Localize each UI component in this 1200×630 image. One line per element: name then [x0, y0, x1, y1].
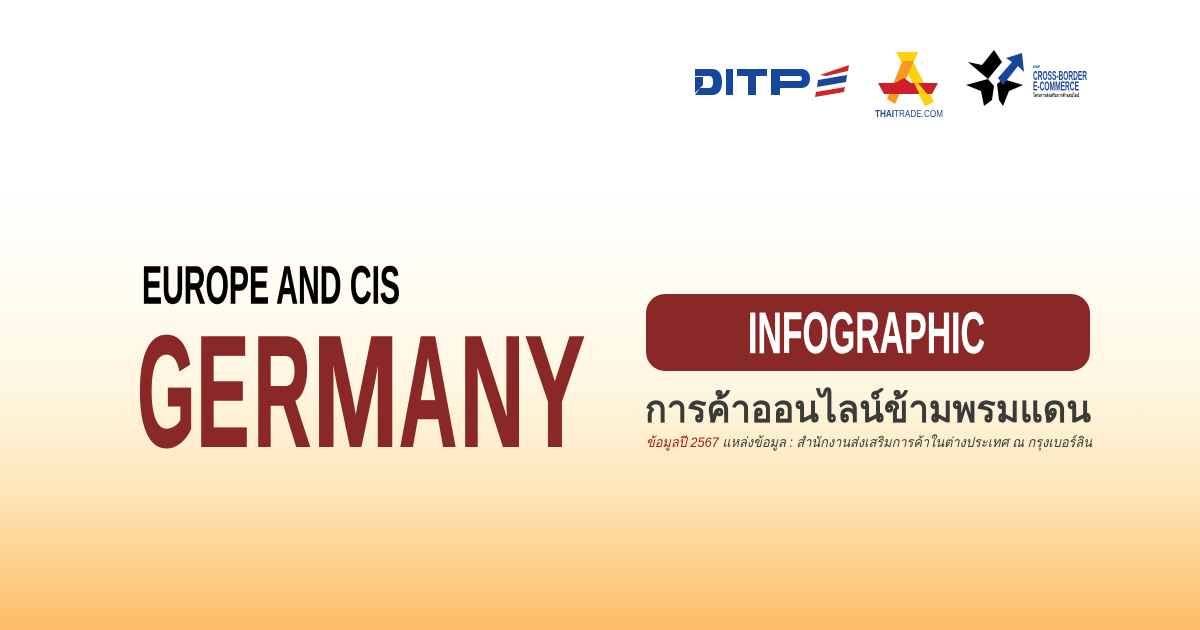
- heading: Germany: A: [399, 304, 457, 480]
- heading: Germany: E: [196, 304, 249, 480]
- subheading: Europe and CIS: EUROPE AND CIS: [142, 256, 400, 316]
- heading: Germany: R: [253, 304, 311, 480]
- heading: Germany: M: [313, 304, 398, 480]
- logo: Cross-Border E-Commerce: [966, 50, 1087, 106]
- logo: Cross-Border E-Commerce: CROSS-BORDER: [1033, 68, 1087, 83]
- logo: Cross-Border E-Commerce: E-COMMERCE: [1033, 80, 1079, 94]
- source note: ข้อมูลปี 2567 แหล่งข้อมูล : สำนักงานส่งเสริมการค้าในต่างประเทศ ณ กรุงเบอร์ลิน: [646, 434, 1092, 451]
- logo: Cross-Border E-Commerce: โครงการส่งเสริมการค้าออนไลน์: [1032, 92, 1079, 99]
- logo: ThaiTrade: THAITRADE.COM: [875, 109, 943, 120]
- heading: Germany: G: [137, 304, 195, 480]
- logo: ThaiTrade: [875, 52, 943, 120]
- logo: DITP: [695, 65, 849, 97]
- heading: Germany: Y: [525, 304, 585, 480]
- banner: Infographic: INFOGRAPHIC: [748, 301, 985, 366]
- logo: Cross-Border E-Commerce: DBP: [1033, 65, 1041, 69]
- heading: Germany: N: [460, 304, 524, 480]
- Thai title: การค้าออนไลน์ข้ามพรมแดน: [645, 387, 1091, 431]
- banner: Infographic: [646, 294, 1090, 371]
